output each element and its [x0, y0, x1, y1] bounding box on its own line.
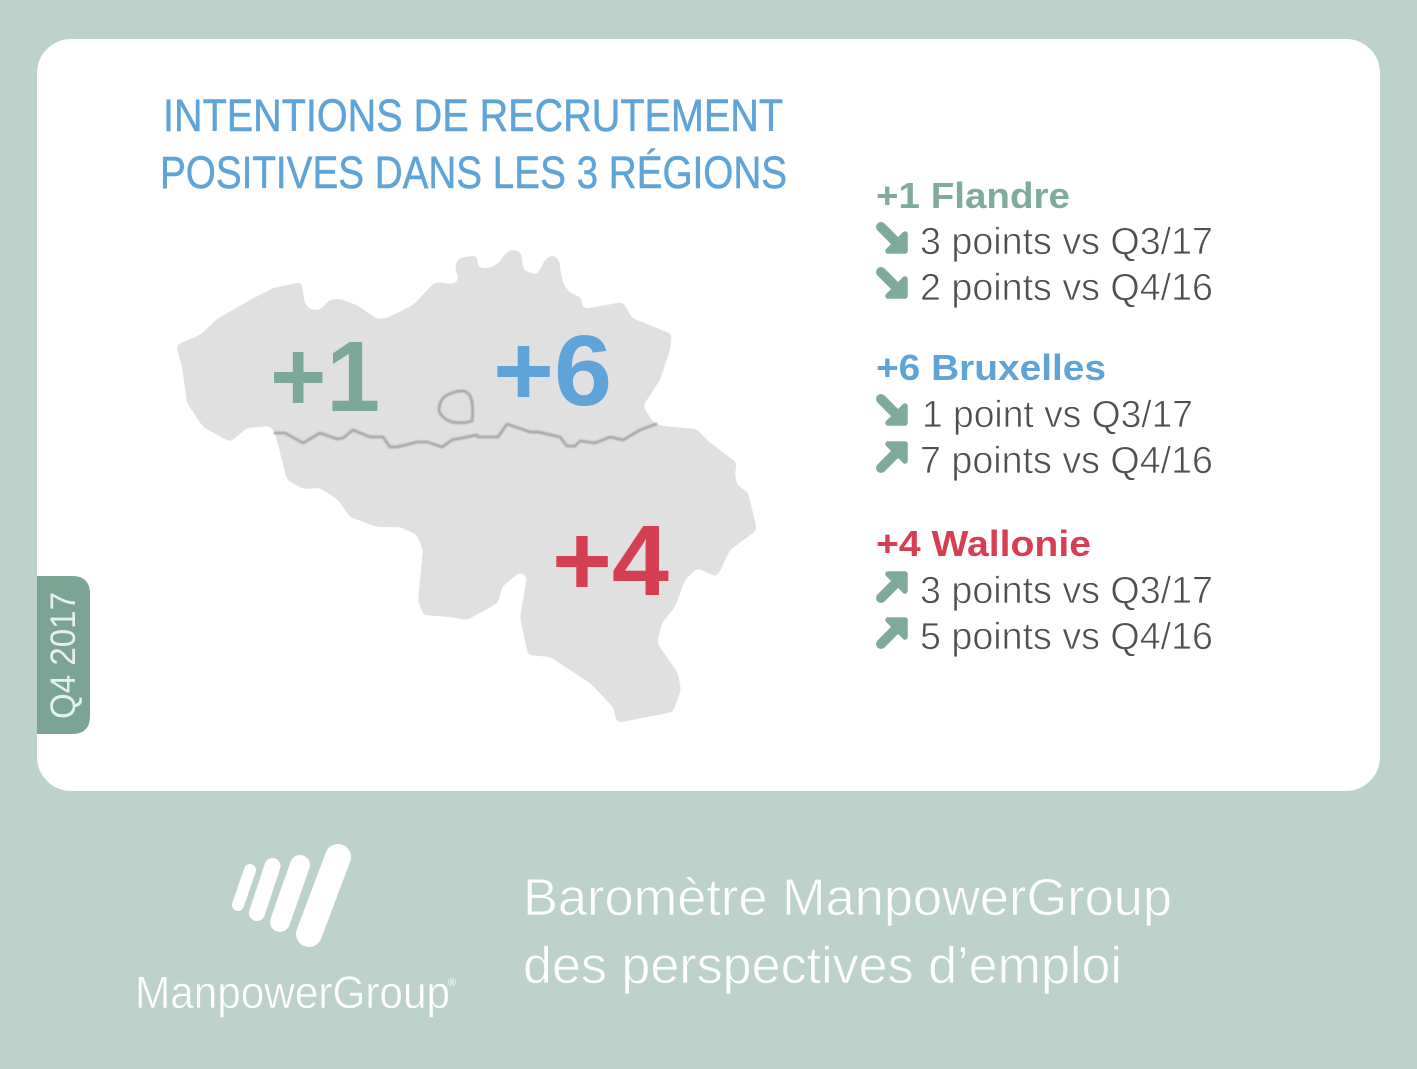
- map of Belgium: [176, 250, 757, 723]
- legend: Flandre: +1 Flandre: [876, 175, 1070, 216]
- legend: Wallonie: +4 Wallonie: [876, 523, 1091, 564]
- arrow up: [881, 574, 905, 598]
- logo mark: [238, 857, 338, 934]
- footer heading: Baromètre ManpowerGroup: [523, 869, 1172, 927]
- legend: Flandre: 3 points vs Q3/17: [920, 221, 1213, 263]
- legend: Bruxelles: 1 point vs Q3/17: [922, 394, 1193, 436]
- white card panel: [37, 39, 1380, 791]
- title: INTENTIONS DE RECRUTEMENT: [163, 90, 783, 141]
- arrow down: [881, 399, 905, 423]
- arrow down: [881, 272, 905, 296]
- arrow down: [881, 227, 905, 251]
- legend: Bruxelles: 7 points vs Q4/16: [920, 440, 1213, 482]
- arrow up: [881, 620, 905, 644]
- quarter tab: [37, 576, 90, 734]
- logo: ManpowerGroup: [135, 857, 456, 1018]
- title: POSITIVES DANS LES 3 RÉGIONS: [160, 147, 787, 198]
- legend: Wallonie: [876, 523, 1213, 658]
- logo: ManpowerGroup: ManpowerGroup: [135, 967, 450, 1018]
- legend: Wallonie: 3 points vs Q3/17: [920, 570, 1213, 612]
- legend: Bruxelles: +6 Bruxelles: [876, 347, 1106, 388]
- footer heading: des perspectives d’emploi: [523, 937, 1122, 995]
- value: Bruxelles: +6: [493, 315, 612, 427]
- legend: Flandre: [876, 175, 1213, 309]
- map outline: [176, 250, 757, 723]
- value: Wallonie: +4: [552, 505, 669, 617]
- Brussels outline: [439, 391, 473, 423]
- value: Flandre: +1: [270, 321, 380, 433]
- logo: ManpowerGroup: ®: [448, 977, 456, 989]
- regional border: [275, 424, 656, 447]
- arrow up: [881, 444, 905, 468]
- legend: Bruxelles: [876, 347, 1213, 482]
- legend: Wallonie: 5 points vs Q4/16: [920, 616, 1213, 658]
- footer heading: [523, 869, 1172, 995]
- quarter tab: Q4 2017: [44, 592, 83, 719]
- legend: Flandre: 2 points vs Q4/16: [920, 267, 1213, 309]
- title: [160, 90, 787, 198]
